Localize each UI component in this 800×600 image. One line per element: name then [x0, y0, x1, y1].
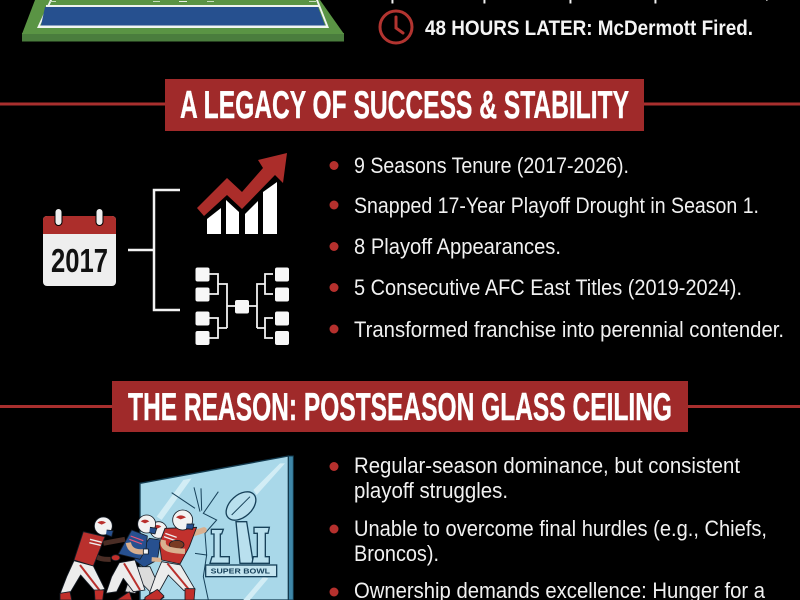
glass pane with Super Bowl logo [140, 456, 293, 600]
list: legacy achievements: 8 Playoff Appearances. [354, 234, 561, 259]
icon: football field [22, 0, 344, 42]
icon: 2017 calendar [43, 208, 116, 286]
list: legacy achievements: 9 Seasons Tenure (2017-2026). [354, 153, 629, 178]
player two [106, 515, 157, 600]
list: reasons: Unable to overcome final hurdles (e.g., Chiefs, [354, 516, 767, 541]
section: legacy heading [0, 79, 800, 131]
icon: rising bar chart with arrow [197, 153, 287, 234]
connector bracket [128, 190, 180, 310]
illustration: players pushing against glass ceiling [60, 456, 293, 600]
list: legacy achievements: 5 Consecutive AFC East Titles (2019-2024). [354, 275, 742, 300]
player three (behind) [125, 522, 167, 600]
list: reasons: playoff struggles. [354, 478, 508, 503]
list: legacy achievements [330, 153, 784, 342]
icon: clock [380, 11, 412, 43]
list: reasons [330, 453, 767, 600]
list: reasons: Regular-season dominance, but consistent [354, 453, 740, 478]
glass pane with Super Bowl logo: SUPER BOWL [211, 566, 270, 575]
icon: playoff bracket [196, 268, 289, 345]
list: reasons: Broncos). [354, 541, 439, 566]
player one [60, 517, 125, 600]
player four [145, 510, 204, 600]
list: legacy achievements: Snapped 17-Year Playoff Drought in Season 1. [354, 193, 759, 218]
icon: 2017 calendar: 2017 [51, 242, 108, 279]
football players [60, 510, 204, 600]
callout: 48 hours later: 48 HOURS LATER: McDermott Fired. [425, 16, 753, 40]
top text: cropped descenders of the preceding line [390, 0, 770, 4]
